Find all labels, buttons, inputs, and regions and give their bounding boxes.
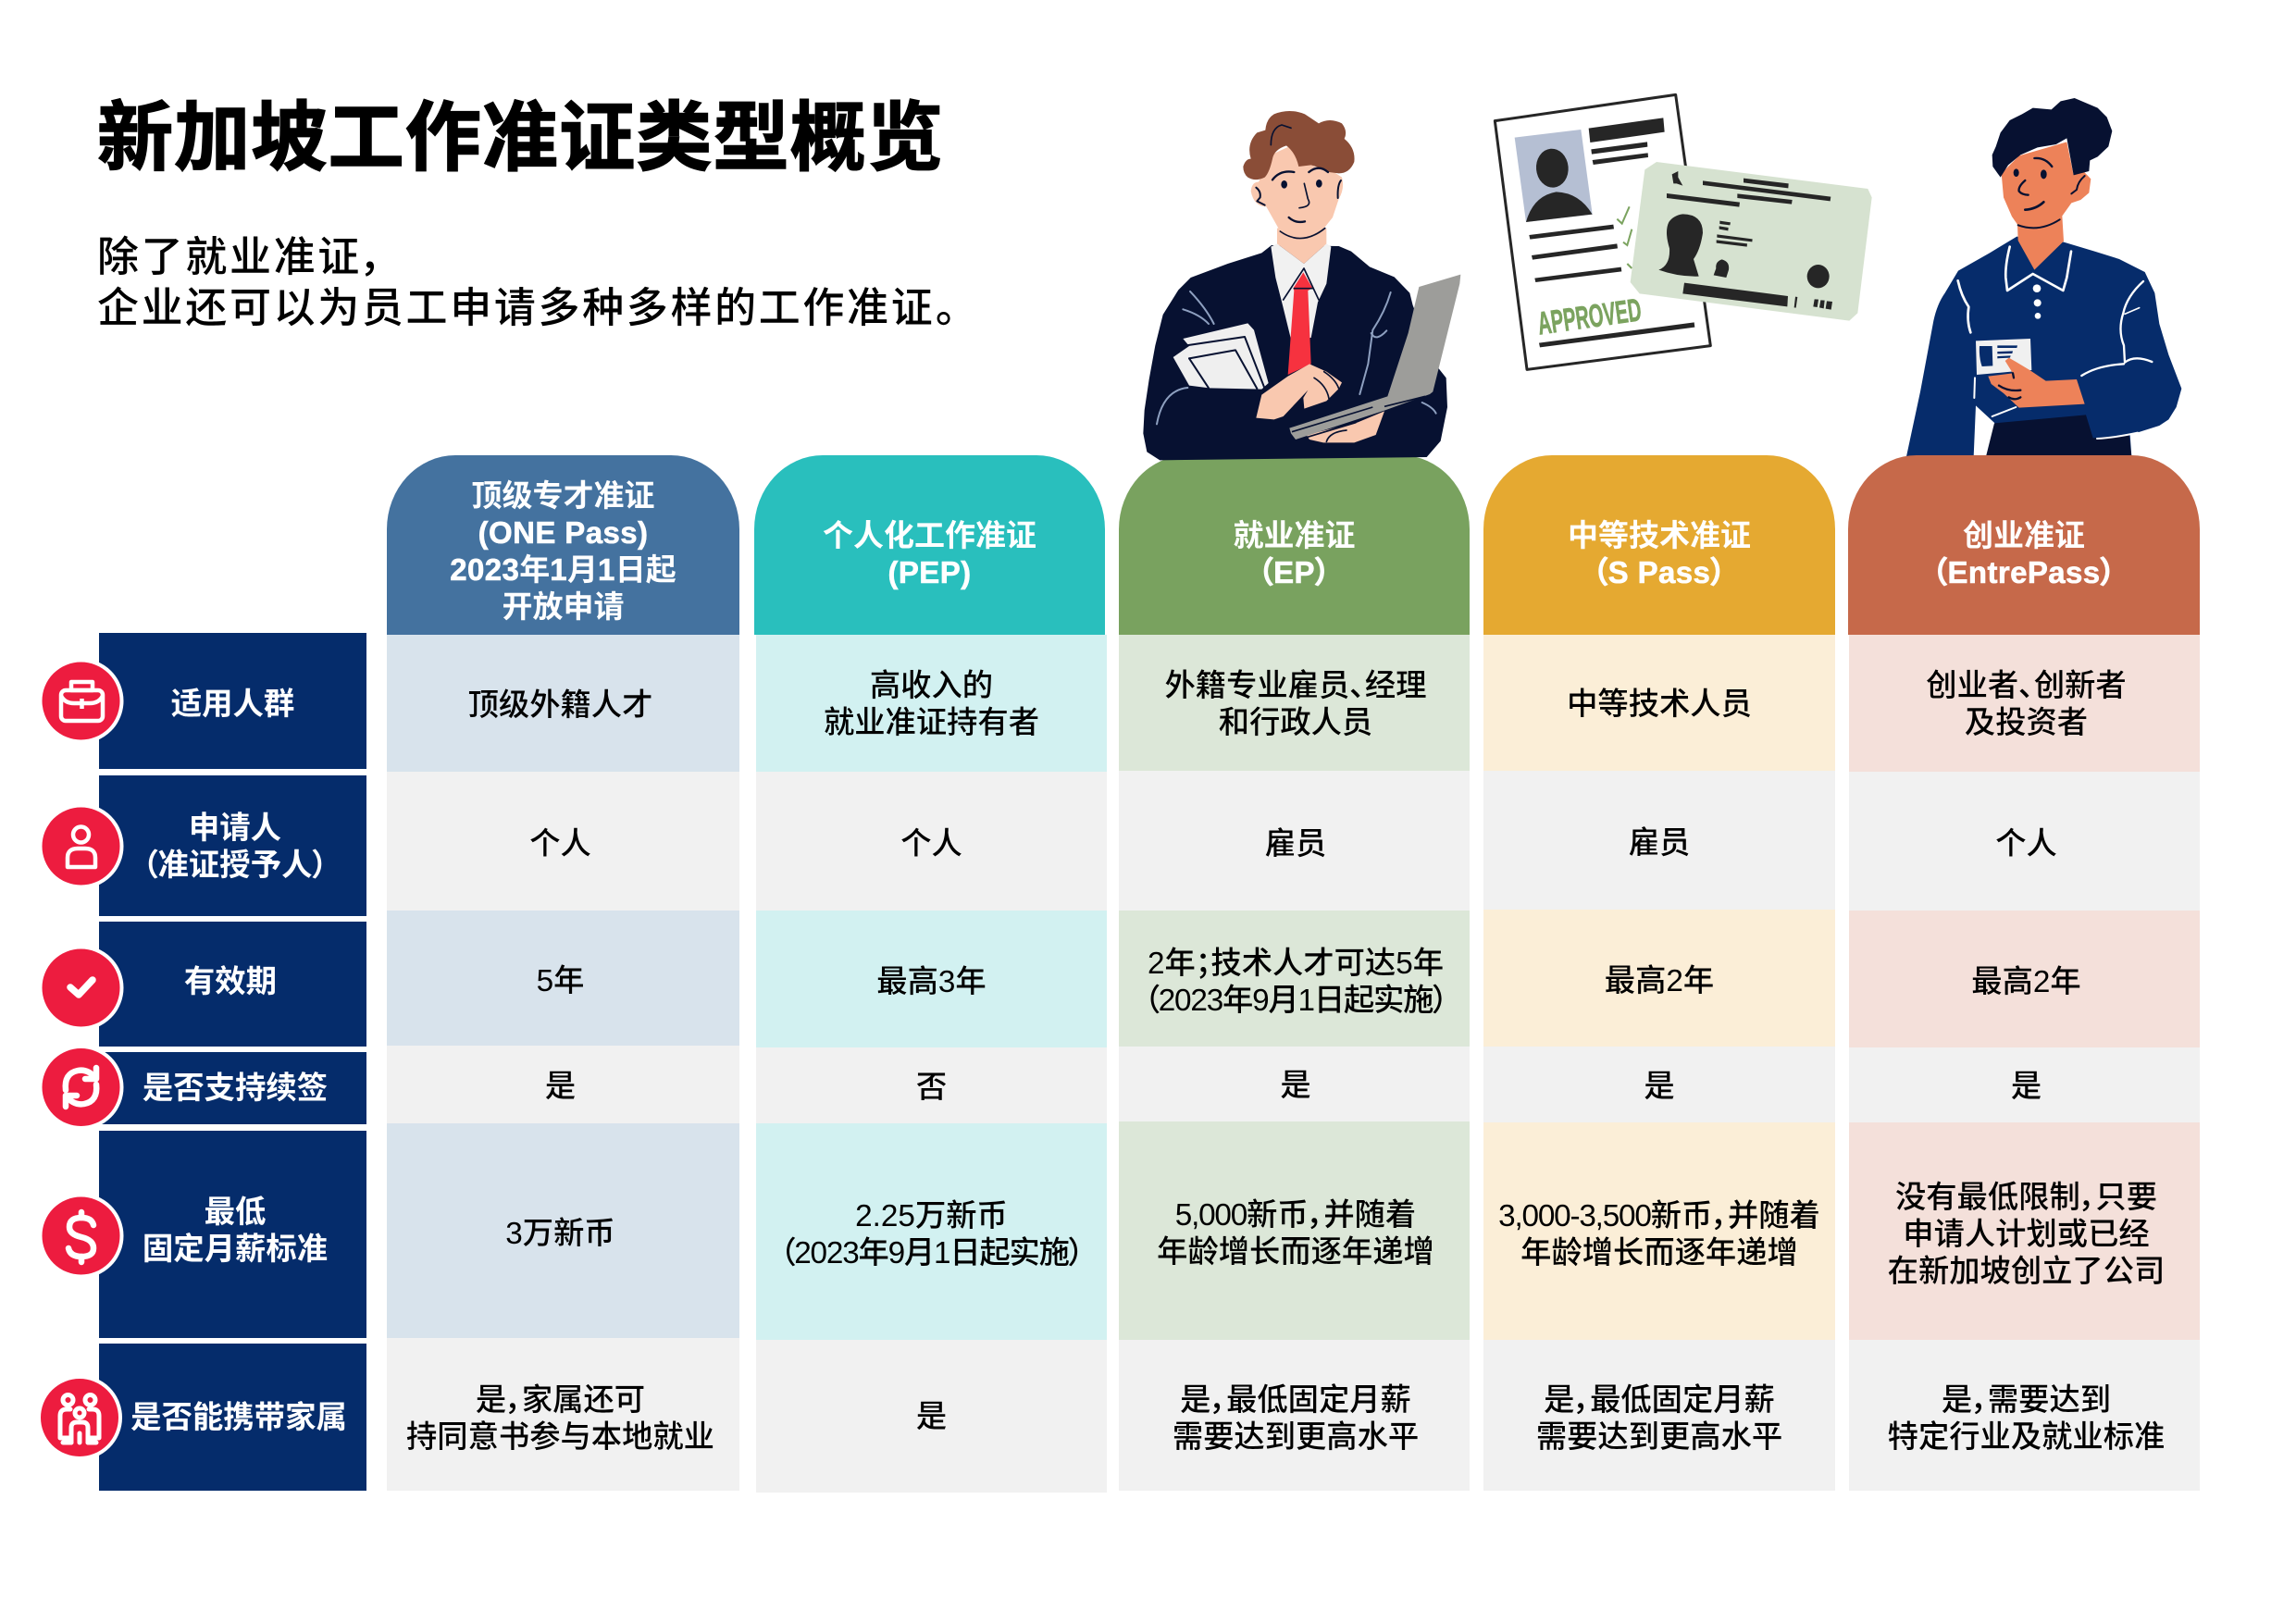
cell: 2.25万新币 [855, 1199, 1008, 1233]
cell: 最高2年 [1605, 964, 1714, 998]
cell [387, 1123, 739, 1338]
shirt [1271, 243, 1331, 340]
cell: 个人 [900, 827, 962, 861]
panel: permit column 3 EP [1119, 457, 1470, 1491]
ID card [1631, 162, 1872, 321]
heading: PEP: (PEP) [887, 555, 972, 588]
cell [387, 911, 739, 1046]
cell: 没有最低限制，只要 [1895, 1181, 2157, 1214]
cell: 雇员 [1265, 827, 1326, 861]
cell: 2年；技术人才可达5年 [1148, 946, 1444, 981]
cell [1119, 911, 1470, 1047]
row label: renewal: 是否支持续签 [143, 1072, 328, 1106]
cell: 顶级外籍人才 [468, 688, 652, 722]
face and neck [1251, 145, 1343, 264]
cell: 创业者、创新者 [1926, 669, 2127, 703]
cell: 是，家属还可 [476, 1382, 645, 1418]
title: 新加坡工作准证类型概览 [97, 96, 944, 180]
cell: 需要达到更高水平 [1536, 1419, 1782, 1455]
cell: 申请人计划或已经 [1903, 1218, 2150, 1251]
cell [1483, 1122, 1835, 1340]
icon: renew arrows [41, 1047, 122, 1128]
heading: ONE Pass: 顶级专才准证 [471, 477, 654, 513]
cell: 个人 [529, 827, 591, 861]
cell: （2023年9月1日起实施） [1144, 983, 1447, 1018]
cell [1849, 1047, 2200, 1122]
document: APPROVED [1535, 292, 1644, 342]
row label: audience [99, 633, 366, 769]
cell [1483, 910, 1835, 1047]
heading: ONE Pass: (ONE Pass) [478, 514, 648, 550]
cell: 3万新币 [505, 1217, 615, 1251]
cell [756, 1047, 1107, 1123]
cell: 中等技术人员 [1567, 688, 1752, 722]
document [1495, 94, 1710, 369]
laptop [1289, 275, 1460, 440]
heading: EntrePass: （EntrePass） [1932, 555, 2116, 588]
icon: check mark [41, 948, 122, 1029]
icon: briefcase [41, 661, 122, 742]
cell [1119, 771, 1470, 911]
panel: permit column 1 ONE Pass [387, 455, 739, 1491]
row label: applicant [99, 775, 366, 916]
heading: EP [1119, 455, 1470, 635]
cell: 是 [1280, 1069, 1311, 1103]
cell: 个人 [1995, 827, 2057, 861]
eyes [1281, 180, 1287, 189]
cell: 是 [916, 1400, 947, 1434]
cell [756, 911, 1107, 1047]
cell: 及投资者 [1965, 706, 2088, 740]
panel: permit column 4 S Pass [1483, 455, 1835, 1491]
cell [1119, 1047, 1470, 1121]
subtitle text: 企业还可以为员工申请多种多样的工作准证。 [97, 284, 959, 331]
panel: permit column 2 PEP [754, 455, 1107, 1493]
row label: minimum salary: 最低 [205, 1196, 266, 1230]
row label: validity [99, 922, 366, 1047]
heading: ONE Pass [387, 455, 739, 635]
heading: S Pass [1483, 455, 1835, 635]
subtitle text: 除了就业准证， [97, 233, 385, 280]
cell: 外籍专业雇员、经理 [1164, 668, 1427, 703]
row label: renewal [99, 1052, 366, 1124]
row label: validity: 有效期 [184, 965, 277, 999]
heading: PEP [754, 455, 1105, 635]
row label: family [99, 1344, 366, 1491]
cell: 最高2年 [1971, 965, 2081, 999]
cell: 年龄增长而逐年递增 [1520, 1236, 1798, 1270]
jacket [1143, 245, 1447, 460]
cell [1849, 911, 2200, 1047]
cell [1119, 635, 1470, 771]
cell [387, 635, 739, 772]
cell: 5,000新币，并随着 [1175, 1198, 1416, 1233]
cell [1119, 1340, 1470, 1491]
cell [756, 635, 1107, 772]
cell [1849, 772, 2200, 911]
cell [387, 1046, 739, 1123]
heading: ONE Pass: 开放申请 [502, 588, 624, 624]
cell: 雇员 [1629, 826, 1690, 861]
subtitle text [97, 233, 959, 331]
row label: applicant: （准证授予人） [143, 849, 328, 883]
cell: 在新加坡创立了公司 [1888, 1255, 2165, 1288]
heading: EP: （EP） [1258, 555, 1331, 588]
row label: audience: 适用人群 [171, 688, 294, 722]
heading: S Pass: （S Pass） [1593, 555, 1726, 588]
cell [756, 1123, 1107, 1340]
cell [1849, 1122, 2200, 1340]
row label: minimum salary: 固定月薪标准 [143, 1233, 328, 1267]
cell [1849, 635, 2200, 772]
heading: PEP: 个人化工作准证 [823, 518, 1036, 551]
cell: 是，最低固定月薪 [1180, 1382, 1411, 1418]
cell: 就业准证持有者 [824, 705, 1039, 740]
cell: （2023年9月1日起实施） [780, 1236, 1083, 1270]
icon: dollar sign [41, 1196, 122, 1277]
cell: 3,000-3,500新币，并随着 [1498, 1199, 1820, 1233]
cell [1483, 635, 1835, 771]
cell: 是 [545, 1070, 576, 1103]
row label: family: 是否能携带家属 [130, 1401, 347, 1435]
cell: 持同意书参与本地就业 [406, 1419, 714, 1455]
row label: minimum salary [99, 1131, 366, 1338]
cell: 高收入的 [870, 668, 993, 703]
cell: 5年 [537, 964, 584, 998]
cell: 是 [1644, 1070, 1675, 1103]
cell: 特定行业及就业标准 [1888, 1419, 2165, 1455]
illustration: approved document and ID card [1495, 94, 1872, 369]
tie [1288, 272, 1312, 375]
cell: 和行政人员 [1219, 705, 1372, 740]
hands [1256, 364, 1342, 419]
cell [756, 1340, 1107, 1493]
cell: 是，需要达到 [1942, 1382, 2111, 1418]
heading: S Pass: 中等技术准证 [1568, 518, 1751, 551]
hair [1243, 111, 1355, 180]
cell [756, 772, 1107, 911]
row label: applicant: 申请人 [189, 812, 281, 846]
cell [1119, 1121, 1470, 1340]
cell: 年龄增长而逐年递增 [1157, 1235, 1434, 1270]
cell [1483, 1340, 1835, 1491]
panel: permit column 5 EntrePass [1848, 455, 2200, 1491]
icon: family [39, 1377, 120, 1458]
cell: 是 [2011, 1070, 2042, 1104]
cell [387, 772, 739, 911]
illustration: man in suit with laptop [1143, 111, 1460, 460]
papers [1173, 323, 1269, 390]
cell: 否 [916, 1070, 947, 1105]
cell: 需要达到更高水平 [1173, 1419, 1419, 1455]
heading: EP: 就业准证 [1233, 518, 1355, 551]
icon: person [41, 805, 122, 886]
heading: EntrePass: 创业准证 [1963, 518, 2085, 551]
heading: EntrePass [1848, 455, 2200, 635]
heading: ONE Pass: 2023年1月1日起 [450, 551, 676, 587]
cell [1483, 1047, 1835, 1122]
cell [1849, 1340, 2200, 1491]
cell: 是，最低固定月薪 [1544, 1382, 1775, 1418]
cell [1483, 771, 1835, 910]
cell [387, 1338, 739, 1491]
cell: 最高3年 [876, 965, 987, 999]
